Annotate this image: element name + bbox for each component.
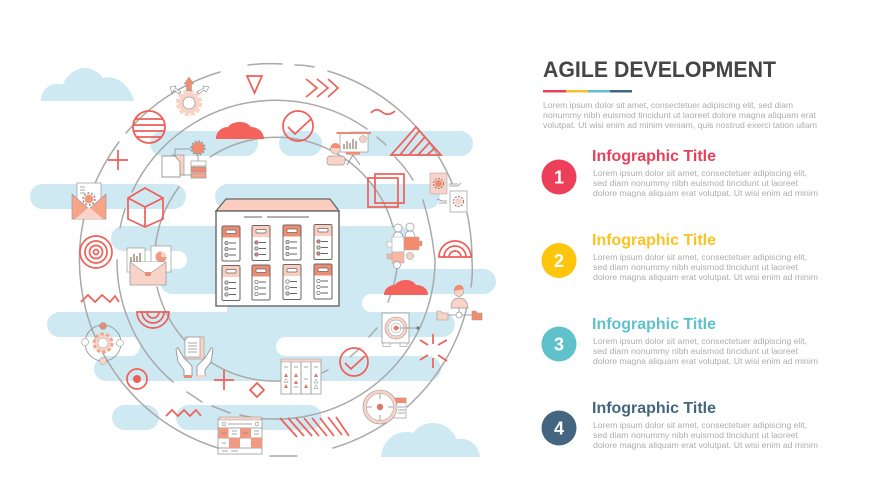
- inner ring: [155, 137, 397, 381]
- number badge 1: [542, 160, 576, 194]
- card: row 1 column 3: [283, 225, 301, 260]
- intro text: [543, 100, 817, 130]
- card: row 2 column 4: [314, 264, 332, 299]
- intro text: nonummy nibh euismod tincidunt ut laoreet dolore magna aliquam erat: [543, 110, 817, 120]
- icon: bullseye: [127, 369, 147, 389]
- item 1: Lorem ipsum dolor sit amet, consectetuer adipiscing elit,: [593, 168, 807, 178]
- icon: puzzle team: [387, 223, 422, 268]
- item 1: [542, 148, 818, 198]
- card: row 1 column 4: [314, 224, 332, 260]
- icon: hatched triangle: [391, 127, 441, 155]
- icon: zigzag lower: [166, 410, 201, 416]
- item 2: [542, 232, 818, 282]
- icon: calendar grid: [218, 417, 262, 454]
- item 2: Infographic Title: [592, 232, 716, 249]
- item 4: Infographic Title: [592, 400, 716, 417]
- icon: target safe: [382, 313, 420, 346]
- icon: envelope with charts: [127, 246, 171, 285]
- card: row 1 column 2: [252, 226, 270, 260]
- icon: clock target with clipboard: [363, 390, 406, 424]
- title: AGILE DEVELOPMENT: [543, 57, 776, 82]
- icon: triangle outline: [247, 76, 262, 93]
- icon: plus lower: [214, 370, 234, 390]
- item 2: Lorem ipsum dolor sit amet, consectetuer adipiscing elit,: [593, 252, 807, 262]
- icon: check circle: [283, 111, 313, 141]
- icon: tilde: [371, 110, 395, 114]
- icon: presenter with board: [327, 132, 371, 165]
- icon: hands with document: [176, 337, 213, 378]
- item 2: sed diam nonummy nibh euismod tincidunt ut laoreet: [593, 262, 799, 272]
- panel: central kanban board: [216, 199, 339, 306]
- icon: envelope with gear: [72, 183, 106, 219]
- item 3: [542, 316, 818, 366]
- number badge 3: [542, 326, 576, 362]
- middle ring: [117, 100, 435, 419]
- item 3: sed diam nonummy nibh euismod tincidunt ut laoreet: [593, 346, 799, 356]
- icon: hatch lines: [280, 417, 349, 437]
- card: row 2 column 1: [222, 266, 240, 300]
- item 3: Infographic Title: [592, 316, 716, 333]
- icon: gear orbit: [82, 322, 124, 364]
- number badge 4: [542, 410, 576, 446]
- item 3: 3: [554, 334, 564, 354]
- number badge 2: [542, 243, 576, 278]
- icon: plus upper: [108, 150, 128, 170]
- intro text: Lorem ipsum dolor sit amet, consectetuer adipiscing elit, sed diam: [543, 100, 793, 110]
- item 2: 2: [554, 251, 564, 271]
- icon: lower check circle: [340, 348, 368, 376]
- item 4: [542, 400, 818, 450]
- card: row 2 column 3: [283, 264, 301, 300]
- icon: red cloud lower: [384, 280, 428, 295]
- icon: chevrons: [306, 79, 338, 97]
- item 4: 4: [554, 418, 564, 438]
- icon: striped circle: [133, 111, 165, 143]
- item 4: sed diam nonummy nibh euismod tincidunt ut laoreet: [593, 430, 799, 440]
- icon: task table with triangles: [281, 359, 321, 394]
- item 1: 1: [554, 168, 564, 188]
- icon: diamond: [250, 383, 264, 397]
- icon: target rings: [80, 236, 112, 268]
- item 3: Lorem ipsum dolor sit amet, consectetuer adipiscing elit,: [593, 336, 807, 346]
- icon: zigzag left: [81, 295, 119, 302]
- item 3: dolore magna aliquam erat volutpat. Ut wisi enim ad minim: [593, 356, 818, 366]
- icon: documents and server: [162, 141, 206, 178]
- icon: cube: [128, 188, 163, 227]
- icon: swap documents with gears: [430, 173, 467, 212]
- card: row 1 column 1: [222, 226, 240, 261]
- card: row 2 column 2: [252, 265, 270, 300]
- background: white cut-out pills: [60, 209, 492, 356]
- icon: rainbow arc down: [137, 312, 169, 328]
- icon: red cloud: [216, 122, 264, 139]
- icon: burst: [420, 334, 447, 368]
- item 4: dolore magna aliquam erat volutpat. Ut wisi enim ad minim: [593, 440, 818, 450]
- item 2: dolore magna aliquam erat volutpat. Ut wisi enim ad minim: [593, 272, 818, 282]
- background: pale blue bars and clouds: [30, 68, 496, 457]
- icon: person with folders: [437, 285, 482, 320]
- intro text: volutpat. Ut wisi enim ad minim veniam, quis nostrud exerci tation ullam: [543, 120, 817, 130]
- item 1: sed diam nonummy nibh euismod tincidunt ut laoreet: [593, 178, 799, 188]
- item 4: Lorem ipsum dolor sit amet, consectetuer adipiscing elit,: [593, 420, 807, 430]
- outer ring: [79, 64, 472, 456]
- icon: overlapping squares: [368, 174, 404, 207]
- item 1: dolore magna aliquam erat volutpat. Ut wisi enim ad minim: [593, 188, 818, 198]
- title underline: four colours: [543, 90, 632, 92]
- item 1: Infographic Title: [592, 148, 716, 165]
- icon: rainbow arc up: [439, 241, 471, 257]
- icon: gear with arrows: [170, 77, 209, 114]
